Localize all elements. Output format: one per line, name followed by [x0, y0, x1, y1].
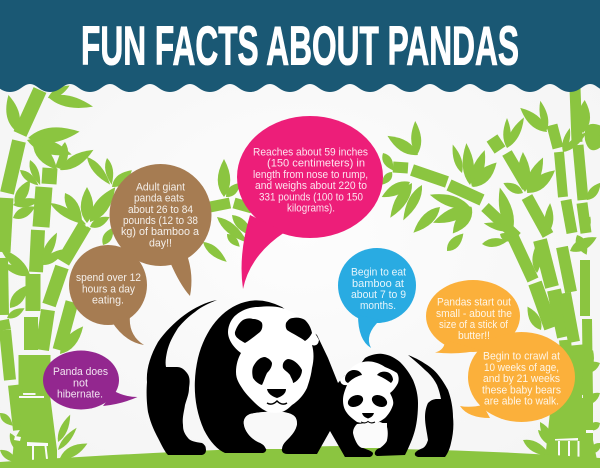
left bamboo cluster — [0, 82, 135, 466]
bubble: size: 331 pounds (100 to 150 — [259, 192, 363, 204]
bubble: hibernate: Panda does — [53, 366, 109, 378]
bubble: hibernate: not — [73, 377, 88, 389]
baby ears — [345, 370, 393, 383]
bubble: crawl and walk — [460, 332, 575, 422]
bubble: eat bamboo age: Begin to eat — [351, 266, 406, 278]
bubble: size: and weighs about 220 to — [255, 180, 367, 192]
baby mouth — [361, 422, 375, 423]
baby belly — [353, 422, 388, 448]
adult left ear — [235, 318, 262, 343]
adult right ear — [286, 318, 312, 341]
left bamboo base — [12, 395, 57, 462]
bubble: eat bamboo age: bamboo at — [352, 278, 404, 290]
bubble: eat bamboo age: months. — [360, 300, 396, 312]
bubble: size: kilograms). — [287, 203, 335, 215]
panda: adult — [147, 300, 363, 457]
bubble: bamboo per day: Adult giant — [136, 182, 185, 194]
right bamboo base — [545, 392, 597, 460]
bubble: size: (150 centimeters) in — [267, 158, 365, 170]
bubble: bamboo per day — [110, 164, 212, 296]
bubble: crawl and walk: these baby bears — [482, 384, 562, 396]
bubble: start small: Pandas start out — [437, 296, 511, 308]
header banner — [0, 0, 600, 92]
bubble: start small: size of a stick of — [439, 319, 509, 331]
right bamboo cluster — [513, 232, 600, 460]
baby back and hind leg — [408, 355, 453, 457]
bubble: crawl and walk: 10 weeks of age, — [484, 362, 559, 374]
baby head — [340, 361, 399, 424]
bubble: size — [237, 116, 383, 289]
adult head — [228, 306, 319, 413]
bubble: start small: small - about the — [436, 308, 512, 320]
bubble: bamboo per day: pounds (12 to 38 — [123, 215, 198, 227]
adult left eye — [252, 357, 272, 385]
bubble: hours eating: eating. — [92, 294, 124, 306]
bubble: size: Reaches about 59 inches — [253, 146, 369, 158]
bubble: start small: butter!! — [458, 330, 490, 342]
adult belly — [244, 412, 297, 449]
adult nose — [267, 389, 286, 398]
bubble: bamboo per day: day!! — [149, 238, 172, 250]
bubble: crawl and walk: and by 21 weeks — [483, 373, 561, 385]
adult right eye — [283, 359, 302, 383]
adult body — [195, 300, 363, 457]
bubble: crawl and walk: Begin to crawl at — [483, 350, 560, 362]
bubble: bamboo per day: about 26 to 84 — [128, 204, 193, 216]
adult back crescent and hind leg — [147, 300, 217, 455]
bubble: crawl and walk: are able to walk. — [484, 396, 559, 408]
bubble: eat bamboo age — [338, 248, 416, 348]
baby body — [335, 354, 418, 457]
bubble: size: length from nose to rump, — [253, 169, 368, 181]
baby nose — [362, 413, 374, 418]
bubble: hours eating: spend over 12 — [76, 272, 141, 284]
bubble: start small — [426, 280, 520, 353]
bubble: hours eating: hours a day — [82, 283, 136, 295]
bubble: eat bamboo age: about 7 to 9 — [351, 289, 406, 301]
panda: baby — [335, 354, 453, 457]
bubble: hibernate — [43, 350, 138, 410]
baby eyes — [346, 393, 389, 409]
grass ground — [0, 446, 600, 468]
arching bamboo branch — [200, 88, 600, 265]
adult mouth — [267, 401, 287, 404]
bubble: bamboo per day: panda eats — [134, 193, 185, 205]
bubble: hours eating — [69, 245, 147, 345]
bubble: hibernate: hibernate. — [57, 388, 103, 400]
bubble: bamboo per day: kg) of bamboo a — [121, 226, 199, 238]
